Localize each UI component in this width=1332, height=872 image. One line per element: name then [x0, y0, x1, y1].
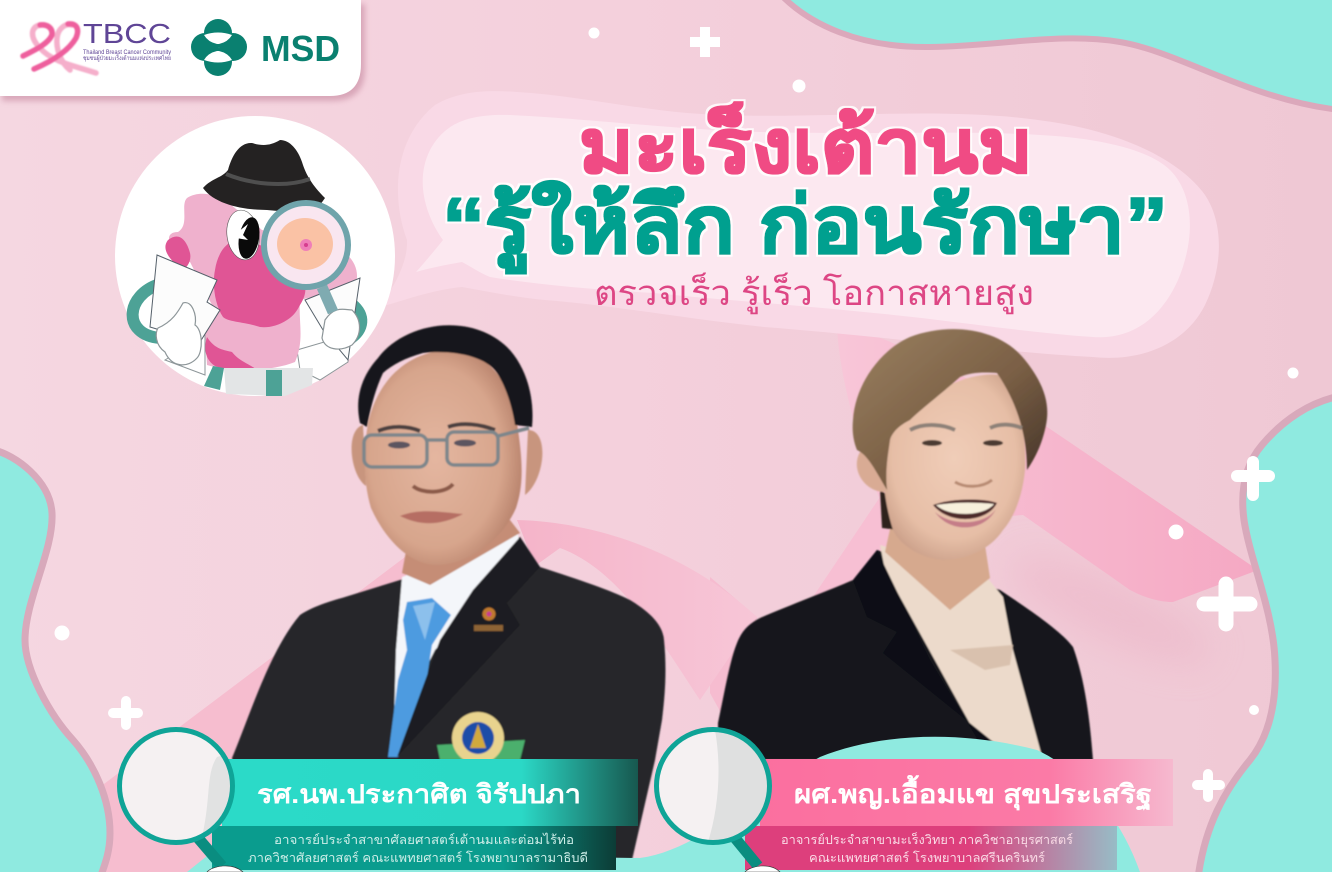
- logo: TBCC wordmark: TBCC: [83, 18, 171, 49]
- mascot: [115, 116, 395, 396]
- mint blob: top right: [780, 0, 1332, 110]
- name bar: [760, 759, 1173, 826]
- nape hair: [880, 490, 898, 530]
- mint blob: left: [0, 450, 110, 872]
- shirt: [393, 534, 522, 757]
- mascot arms: [133, 284, 160, 338]
- mint blob: bottom centre: [187, 737, 1140, 872]
- suit: [232, 537, 665, 860]
- tie: [388, 598, 451, 757]
- name card: presenter 2: [656, 730, 1173, 872]
- mint blob: right: [1198, 396, 1332, 872]
- title line 1: มะเร็งเต้านม: [579, 103, 1033, 188]
- mouth: [400, 511, 463, 523]
- magnifier handle: [735, 838, 758, 866]
- mascot magnifier: [264, 203, 348, 287]
- magnifier lens: [656, 730, 770, 842]
- name bar: [222, 759, 638, 826]
- mascot eye: [224, 208, 262, 262]
- badge: [437, 712, 525, 764]
- title: [442, 103, 1168, 314]
- glove: [207, 866, 243, 872]
- logo panel: [0, 0, 365, 101]
- mascot gloves: [156, 303, 201, 365]
- lips: [935, 509, 996, 527]
- logo: TBCC wordmark: Thailand Breast Cancer Community: [83, 50, 171, 56]
- presenter role: [781, 832, 1073, 865]
- eyebrows: [910, 425, 1022, 430]
- presenter role: คณะแพทยศาสตร์ โรงพยาบาลศรีนครินทร์: [809, 850, 1045, 865]
- head: [883, 375, 1025, 560]
- presenter role: อาจารย์ประจำสาขามะเร็งวิทยา ภาควิชาอายุรศาสตร์: [781, 832, 1073, 848]
- nose: [955, 480, 992, 486]
- mascot magnifier handle: [322, 287, 333, 312]
- glasses: [364, 428, 529, 467]
- mascot lab coat: [165, 335, 348, 380]
- mascot papers: [150, 255, 220, 342]
- presenter name: รศ.นพ.ประกาศิต จิรัปปภา: [257, 779, 581, 809]
- hair: [853, 329, 1047, 490]
- glove: [745, 866, 780, 872]
- logo: TBCC ribbon: [23, 24, 96, 73]
- speech bubble: [380, 91, 1219, 358]
- presenter role: [248, 833, 588, 865]
- magnifier handle: [198, 838, 222, 866]
- mascot body: [169, 194, 357, 370]
- nose shade: [413, 484, 453, 492]
- sub bar: [212, 826, 616, 870]
- eyes: [388, 440, 476, 448]
- magnifier lens: [120, 730, 240, 845]
- lapel: [853, 550, 1010, 760]
- background ribbon left: [100, 520, 757, 872]
- hair: [358, 325, 533, 427]
- teeth: [936, 503, 994, 514]
- smile: [933, 499, 997, 519]
- mascot suspenders: [224, 368, 313, 396]
- neck: [402, 520, 520, 585]
- pin: [474, 608, 503, 631]
- lapel: [397, 537, 540, 757]
- logo: MSD wordmark: MSD: [261, 28, 340, 69]
- presenter 1 photo: [232, 325, 665, 860]
- title line 2: “รู้ให้ลึก ก่อนรักษา”: [442, 180, 1168, 274]
- eyebrows: [378, 424, 495, 431]
- presenter name: ผศ.พญ.เอื้อมแข สุขประเสริฐ: [794, 774, 1152, 812]
- mascot hat: [203, 140, 325, 211]
- presenter 2 photo: [718, 329, 1093, 760]
- head: [365, 350, 522, 565]
- logo: TBCC wordmark: ชุมชนผู้ป่วยมะเร็งเต้านมแห่งประเทศไทย: [83, 53, 171, 62]
- eyes: [922, 440, 1003, 446]
- presenter role: ภาควิชาศัลยศาสตร์ คณะแพทยศาสตร์ โรงพยาบาลรามาธิบดี: [248, 850, 588, 865]
- background ribbon right: [710, 328, 1258, 720]
- ears: [352, 425, 542, 495]
- logo: TBCC wordmark: [83, 18, 171, 62]
- logo: MSD mark: [191, 19, 247, 76]
- neck: [885, 520, 990, 610]
- mascot circle: [115, 116, 395, 396]
- shirt: [880, 545, 1043, 760]
- jacket: [718, 550, 1093, 760]
- ear: [857, 452, 888, 492]
- sub bar: [745, 826, 1117, 870]
- subtitle: ตรวจเร็ว รู้เร็ว โอกาสหายสูง: [594, 272, 1034, 314]
- presenter role: อาจารย์ประจำสาขาศัลยศาสตร์เต้านมและต่อมไร้ท่อ: [274, 833, 574, 847]
- name card: presenter 1: [120, 730, 638, 872]
